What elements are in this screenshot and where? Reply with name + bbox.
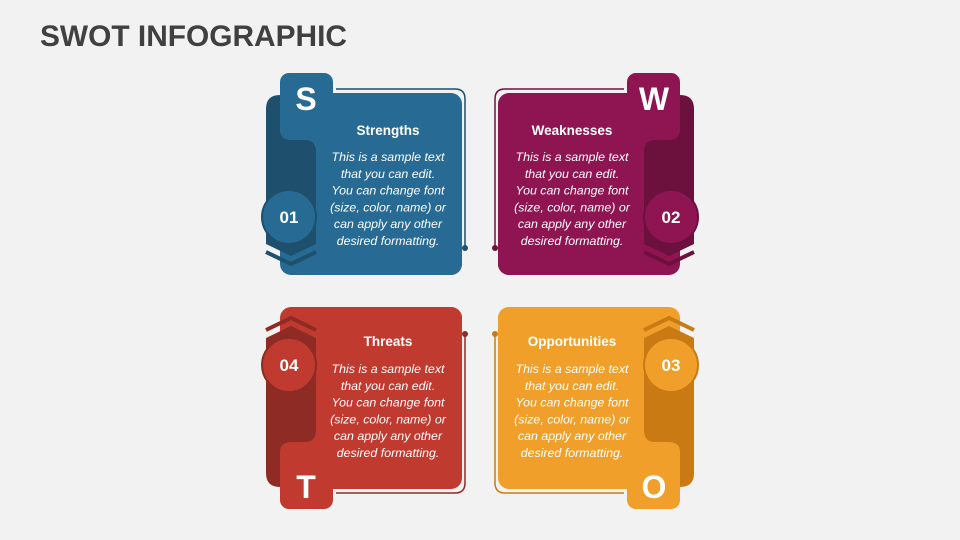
title: SWOT INFOGRAPHIC <box>40 20 347 53</box>
body text: that you can edit. <box>525 167 619 181</box>
number 03: 03 <box>662 356 680 375</box>
body text: This is a sample text <box>516 150 629 164</box>
body text: You can change font <box>516 396 629 410</box>
body text: (size, color, name) or <box>330 200 447 214</box>
number 04: 04 <box>280 356 299 375</box>
body text: You can change font <box>332 396 445 410</box>
body text: can apply any other <box>334 429 443 443</box>
body text: (size, color, name) or <box>514 200 631 214</box>
body text: (size, color, name) or <box>514 412 631 426</box>
body text: desired formatting. <box>521 446 623 460</box>
number 02: 02 <box>662 208 680 227</box>
heading opportunities: Opportunities <box>528 334 616 349</box>
panel: opportunities <box>492 307 698 509</box>
letter S: S <box>295 81 317 117</box>
body text: This is a sample text <box>332 150 445 164</box>
panel: weaknesses <box>492 73 698 275</box>
body text: that you can edit. <box>341 167 435 181</box>
body text: desired formatting. <box>337 234 439 248</box>
panel: threats <box>262 307 468 509</box>
panel: strengths <box>262 73 468 275</box>
letter W: W <box>639 81 670 117</box>
body text: You can change font <box>332 184 445 198</box>
letter T: T <box>296 469 316 505</box>
heading weaknesses: Weaknesses <box>532 123 612 138</box>
body text: can apply any other <box>518 429 627 443</box>
body text: desired formatting. <box>337 446 439 460</box>
number 01: 01 <box>280 208 298 227</box>
heading strengths: Strengths <box>356 123 420 138</box>
body text: This is a sample text <box>516 362 629 376</box>
body text: (size, color, name) or <box>330 412 447 426</box>
letter O: O <box>642 469 666 505</box>
body text: that you can edit. <box>525 379 619 393</box>
body text: This is a sample text <box>332 362 445 376</box>
body text: that you can edit. <box>341 379 435 393</box>
body text: desired formatting. <box>521 234 623 248</box>
body text: You can change font <box>516 184 629 198</box>
heading threats: Threats <box>364 334 412 349</box>
body text: can apply any other <box>334 217 443 231</box>
body text: can apply any other <box>518 217 627 231</box>
